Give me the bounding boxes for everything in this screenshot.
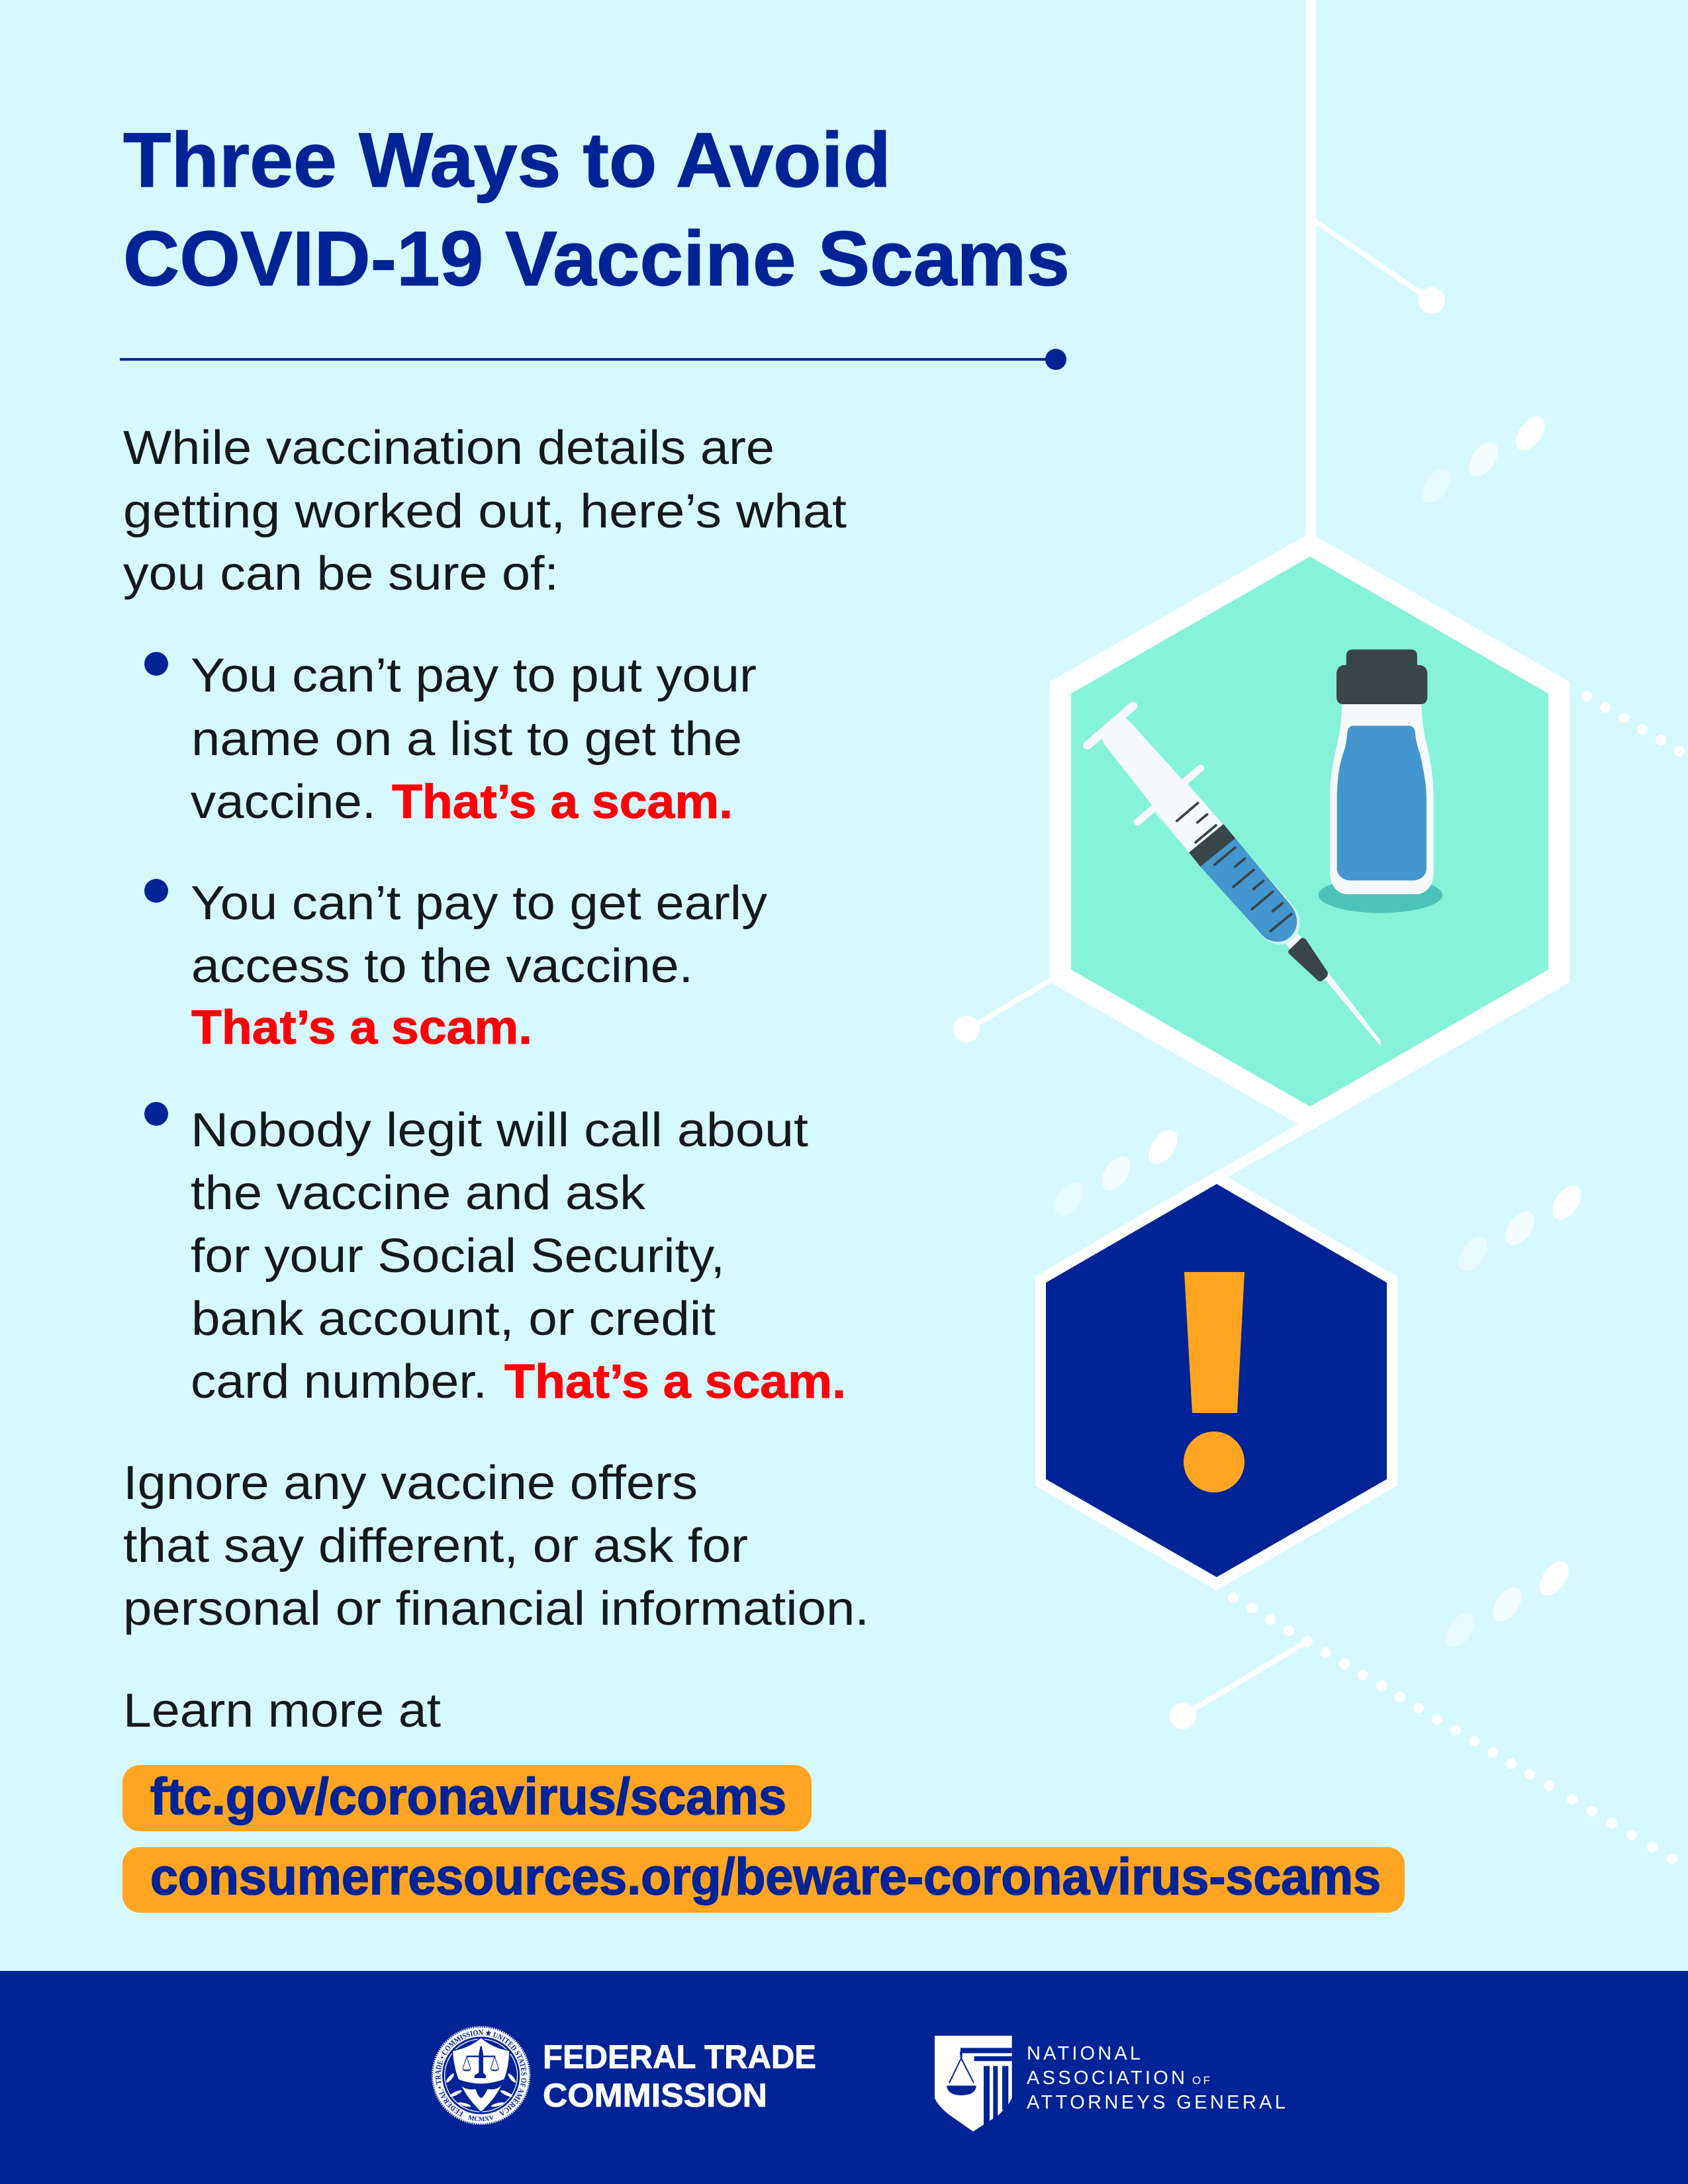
bullet 1: That’s a scam. — [392, 776, 733, 829]
intro text: While vaccination details are — [123, 422, 774, 475]
text: Federal Trade Commission: FEDERAL TRADE — [543, 2038, 816, 2075]
bullet 3: bank account, or credit — [191, 1293, 716, 1345]
closing advice text: that say different, or ask for — [123, 1520, 748, 1572]
closing advice text — [123, 1457, 869, 1635]
text: Federal Trade Commission: COMMISSION — [543, 2077, 767, 2114]
link pill: ftc.gov: ftc.gov/coronavirus/scams — [150, 1767, 786, 1825]
bullet 2: You can’t pay to get early — [191, 877, 767, 930]
learn more text: Learn more at — [123, 1684, 441, 1737]
bullet 3: card number. — [191, 1355, 487, 1408]
text: National Association of Attorneys General: NATIONAL — [1027, 2043, 1141, 2064]
text: National Association of Attorneys General: ASSOCIATION — [1027, 2068, 1185, 2089]
link pill: consumerresources.org: consumerresources.org/beware-coronavirus-scams — [150, 1847, 1381, 1905]
intro text — [123, 422, 847, 600]
text: National Association of Attorneys General: ATTORNEYS GENERAL — [1027, 2092, 1286, 2113]
bullet 3: the vaccine and ask — [191, 1167, 646, 1220]
title: COVID-19 Vaccine Scams — [123, 215, 1070, 302]
intro text: getting worked out, here’s what — [123, 485, 847, 538]
title divider with dot — [120, 349, 1066, 370]
title: Three Ways to Avoid — [123, 116, 891, 203]
icon: FTC seal: MCMXV — [467, 2115, 493, 2122]
bullet 3 — [144, 1102, 846, 1408]
intro text: you can be sure of: — [123, 547, 559, 600]
title — [123, 116, 1070, 302]
icon: syringe — [1088, 706, 1381, 1046]
bullet 1: vaccine. — [191, 776, 376, 829]
bullet 3: Nobody legit will call about — [191, 1104, 808, 1157]
icon: vaccine vial — [1319, 649, 1442, 913]
bullet 1: You can’t pay to put your — [191, 649, 757, 702]
bullet 3: for your Social Security, — [191, 1230, 725, 1283]
bullet 2: access to the vaccine. — [191, 940, 693, 993]
text: Federal Trade Commission — [543, 2038, 816, 2114]
bullet 1 — [144, 649, 757, 829]
text: National Association of Attorneys General — [1027, 2043, 1286, 2113]
bullet 1: name on a list to get the — [191, 713, 742, 766]
closing advice text: personal or financial information. — [123, 1582, 869, 1635]
bullet 2 — [144, 877, 767, 1054]
bullet 3: That’s a scam. — [504, 1355, 846, 1408]
bullet 2: That’s a scam. — [191, 1001, 532, 1054]
background network: lines, dots and pills — [953, 0, 1685, 1864]
icon: NAAG shield — [935, 2036, 1012, 2132]
panel: warning hexagon — [1035, 1171, 1397, 1590]
icon: FTC seal: FEDERAL • TRADE • COMMISSION ★ UNITED STATES OF AMERICA — [436, 2029, 527, 2116]
closing advice text: Ignore any vaccine offers — [123, 1457, 698, 1510]
icon: exclamation mark — [1184, 1272, 1244, 1492]
panel: vaccine hexagon — [1050, 533, 1570, 1131]
text: National Association of Attorneys General: OF — [1192, 2074, 1210, 2087]
footer band — [0, 1971, 1688, 2184]
